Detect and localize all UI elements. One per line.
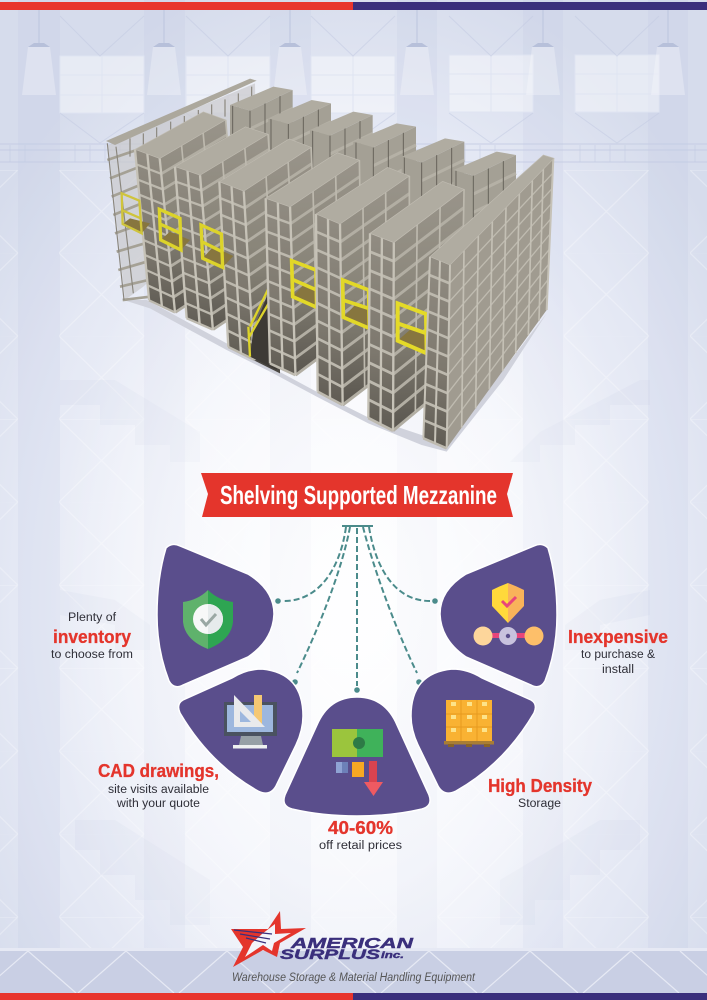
- logo wordmark: inc.: [381, 950, 404, 960]
- shelving rack 3: [217, 138, 320, 360]
- yellow railing 3: [201, 225, 233, 267]
- floor shadow: [123, 300, 547, 452]
- text: plenty of inventory: inventory: [53, 627, 131, 647]
- panel: CAD drawings petal: [179, 669, 303, 793]
- text: plenty of inventory: Plenty of: [68, 612, 117, 624]
- end shelving rack with side panel: [423, 155, 554, 448]
- text: inexpensive: install: [602, 664, 634, 676]
- stairs with yellow rails: [248, 275, 280, 370]
- text: inexpensive: Inexpensive: [568, 627, 668, 647]
- text: high density: Storage: [518, 798, 561, 810]
- dashed connectors: [275, 526, 438, 693]
- yellow railing 6: [398, 303, 438, 353]
- shelving rack 4: [265, 152, 363, 376]
- panel: inventory petal: [157, 544, 274, 687]
- logo wordmark: SURPLUS: [280, 946, 381, 962]
- logo star: [231, 911, 306, 967]
- text: high density: High Density: [488, 776, 592, 796]
- background: cross braces: [0, 170, 707, 950]
- icon: shield and nodes: [474, 583, 544, 646]
- text: CAD drawings: with your quote: [116, 798, 200, 810]
- logo wordmark: AMERICAN: [289, 935, 415, 952]
- icon: money and down arrow: [332, 729, 383, 796]
- background: ceiling lights: [22, 10, 685, 95]
- shelving rack 6: [366, 180, 464, 432]
- text: high density: [488, 776, 592, 810]
- logo: American Surplus: [231, 911, 476, 984]
- panel: inexpensive petal: [440, 544, 557, 687]
- background: windows: [60, 55, 659, 113]
- shelving rack 2: [172, 127, 281, 330]
- icon: boxes on pallet: [444, 700, 494, 747]
- yellow railing 2: [159, 209, 190, 250]
- text: pricing: [319, 818, 402, 852]
- shelving mezzanine illustration: [106, 79, 554, 452]
- stair backing: [247, 283, 280, 373]
- text: CAD drawings: CAD drawings,: [98, 761, 219, 781]
- back row short units: [230, 87, 516, 250]
- banner title text: Shelving Supported Mezzanine: [220, 480, 497, 510]
- text: inexpensive: to purchase &: [581, 649, 655, 661]
- text: pricing: off retail prices: [319, 840, 402, 852]
- title banner: [201, 473, 513, 517]
- icon: green shield: [183, 590, 233, 649]
- yellow railing 4: [292, 261, 328, 307]
- background: upper railing: [0, 16, 707, 162]
- icon: CAD monitor: [224, 695, 277, 748]
- panel: pricing petal: [284, 697, 430, 816]
- top colour bar: [0, 2, 707, 10]
- yellow railing 1: [122, 193, 150, 233]
- connector end dots: [275, 598, 438, 693]
- text: pricing: 40-60%: [328, 818, 393, 838]
- text: plenty of inventory: [51, 612, 133, 661]
- text: CAD drawings: [98, 761, 219, 810]
- background: staircases: [60, 380, 650, 925]
- bottom colour bar: [0, 993, 707, 1000]
- logo tagline: Warehouse Storage & Material Handling Equipment: [232, 972, 476, 984]
- panel: high density petal: [411, 669, 535, 793]
- yellow railing 5: [343, 280, 380, 328]
- logo wordmark: [280, 935, 415, 962]
- text: plenty of inventory: to choose from: [51, 649, 133, 661]
- background: floor band: [0, 948, 707, 993]
- shelving rack 5: [316, 167, 409, 405]
- far left shelving row: [106, 79, 257, 300]
- shelving rack 1: [132, 110, 242, 314]
- text: CAD drawings: site visits available: [108, 784, 209, 796]
- text: inexpensive: [568, 627, 668, 676]
